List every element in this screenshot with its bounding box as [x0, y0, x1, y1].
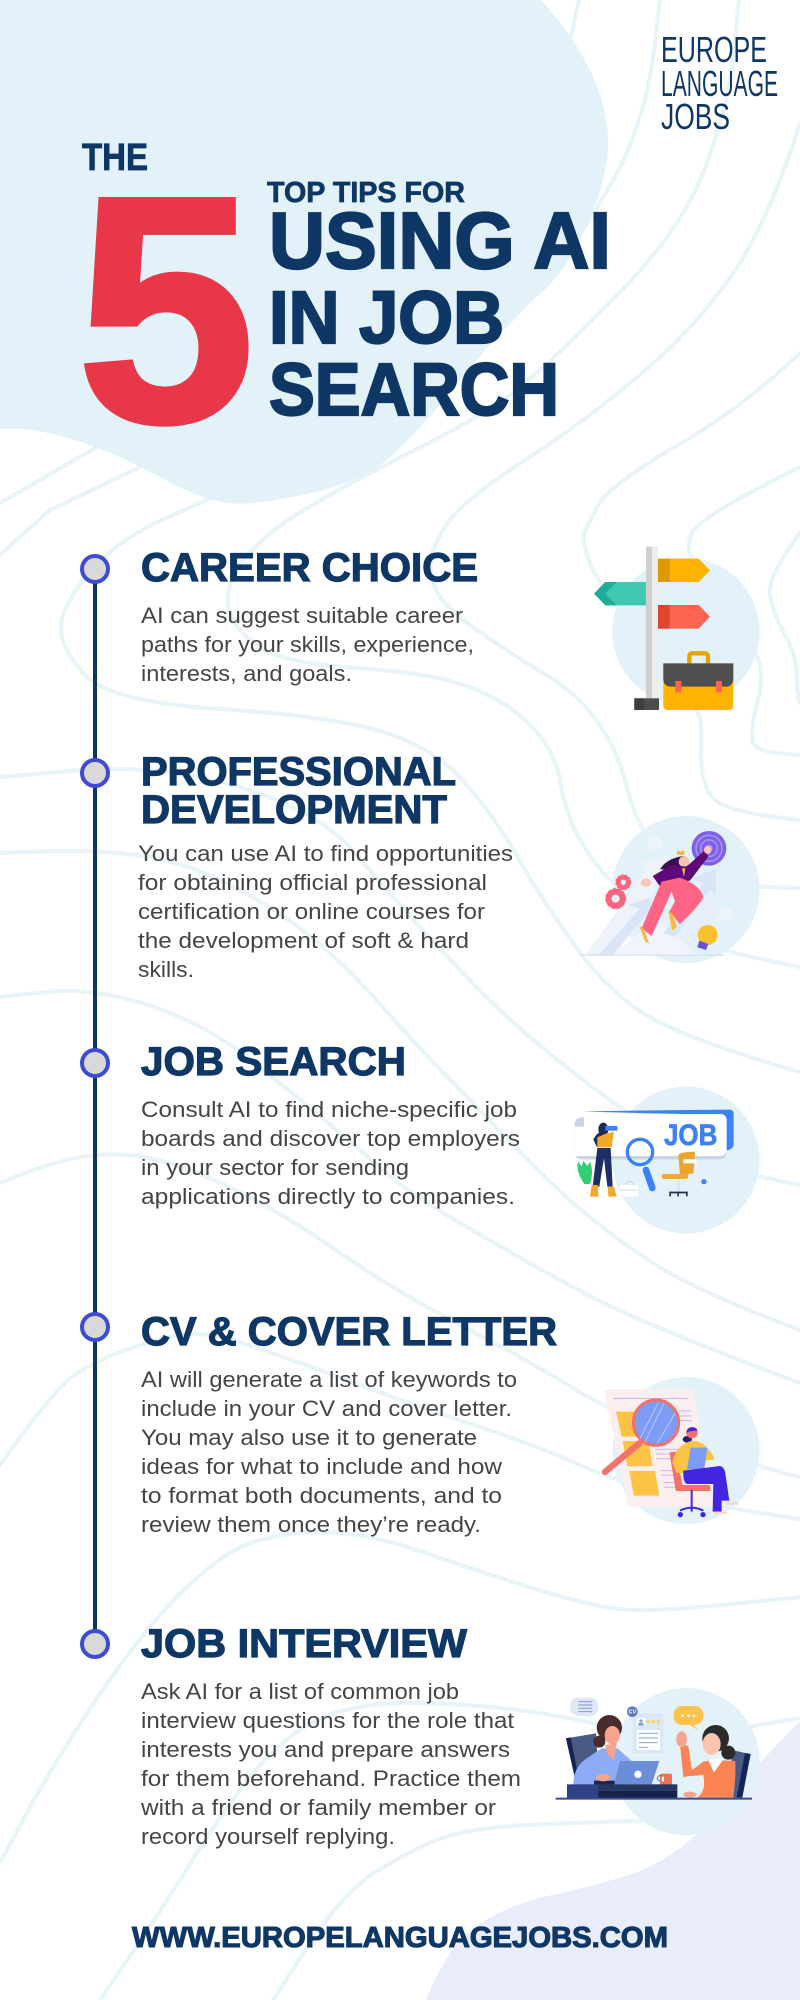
text: cv and cover letter body: You may also use it to generate: [141, 1425, 477, 1450]
illustration: job interview at desk: CV: [628, 1710, 636, 1716]
heading: career choice: CAREER CHOICE: [141, 546, 478, 590]
text: job search body: in your sector for sending: [141, 1155, 409, 1180]
logo: JOBS: [661, 96, 730, 137]
heading: cv and cover letter: CV & COVER LETTER: [141, 1310, 557, 1354]
timeline: [82, 556, 108, 1657]
title: big number 5: 5: [77, 131, 255, 490]
text: career choice body: AI can suggest suitable career: [141, 603, 464, 628]
text: professional development body: You can use AI to find opportunities: [138, 841, 513, 866]
heading: job search: JOB SEARCH: [141, 1040, 406, 1084]
text: job interview body: Ask AI for a list of common job: [141, 1679, 459, 1704]
text: job search body: [141, 1097, 520, 1209]
heading: professional development: PROFESSIONAL: [141, 750, 456, 794]
text: job interview body: with a friend or family member or: [140, 1795, 497, 1820]
illustration: woman rising on arrows: [579, 816, 760, 963]
panel: job search: [141, 1040, 520, 1209]
illustration: job interview at desk: [556, 1688, 760, 1835]
text: cv and cover letter body: include in your CV and cover letter.: [141, 1396, 512, 1421]
text: job search body: applications directly to companies.: [141, 1184, 515, 1209]
text: job interview body: interests you and prepare answers: [141, 1737, 510, 1762]
text: professional development body: [138, 841, 513, 982]
text: job interview body: interview questions for the role that: [141, 1708, 515, 1733]
heading: professional development: DEVELOPMENT: [141, 788, 447, 832]
text: job search body: boards and discover top employers: [141, 1126, 520, 1151]
footer website: WWW.EUROPELANGUAGEJOBS.COM: [132, 1922, 668, 1954]
illustration: signpost and briefcase: [594, 547, 760, 710]
title: search: SEARCH: [269, 348, 559, 431]
title: using AI: USING AI: [269, 196, 611, 285]
illustration: job search bar: JOB: [664, 1119, 717, 1152]
text: professional development body: skills.: [138, 957, 194, 982]
title: [77, 131, 611, 490]
heading: job interview: JOB INTERVIEW: [141, 1622, 467, 1666]
bottom background blob: [426, 1721, 800, 2000]
timeline dot 4: [82, 1314, 108, 1340]
text: career choice body: paths for your skills, experience,: [141, 632, 474, 657]
text: cv and cover letter body: review them once they’re ready.: [141, 1512, 481, 1537]
title: THE: THE: [82, 137, 148, 179]
timeline dot 2: [82, 760, 108, 786]
title: in job: IN JOB: [269, 276, 504, 359]
text: cv and cover letter body: [141, 1367, 517, 1537]
title: top tips for: TOP TIPS FOR: [267, 177, 465, 209]
text: professional development body: the development of soft & hard: [138, 928, 469, 953]
text: job search body: Consult AI to find niche-specific job: [141, 1097, 517, 1122]
timeline dot 5: [82, 1631, 108, 1657]
text: professional development body: for obtaining official professional: [138, 870, 487, 895]
text: career choice body: interests, and goals.: [141, 661, 352, 686]
heading: professional development: [141, 750, 456, 832]
illustration: document review with magnifier: [604, 1377, 760, 1524]
timeline dot 3: [82, 1050, 108, 1076]
panel: professional development: [138, 750, 513, 982]
text: professional development body: certification or online courses for: [138, 899, 486, 924]
top background blob: [0, 0, 608, 504]
text: job interview body: record yourself replying.: [141, 1824, 395, 1849]
panel: job interview: [140, 1622, 521, 1849]
panel: career choice: [141, 546, 478, 686]
text: cv and cover letter body: AI will generate a list of keywords to: [141, 1367, 517, 1392]
text: job interview body: for them beforehand. Practice them: [141, 1766, 521, 1791]
panel: cv and cover letter: [141, 1310, 557, 1537]
illustration: job search bar: [575, 1086, 760, 1234]
logo: [661, 29, 778, 137]
text: cv and cover letter body: ideas for what to include and how: [141, 1454, 503, 1479]
timeline dot 1: [82, 556, 108, 582]
text: career choice body: [141, 603, 474, 686]
text: job interview body: [140, 1679, 521, 1849]
text: cv and cover letter body: to format both documents, and to: [141, 1483, 502, 1508]
